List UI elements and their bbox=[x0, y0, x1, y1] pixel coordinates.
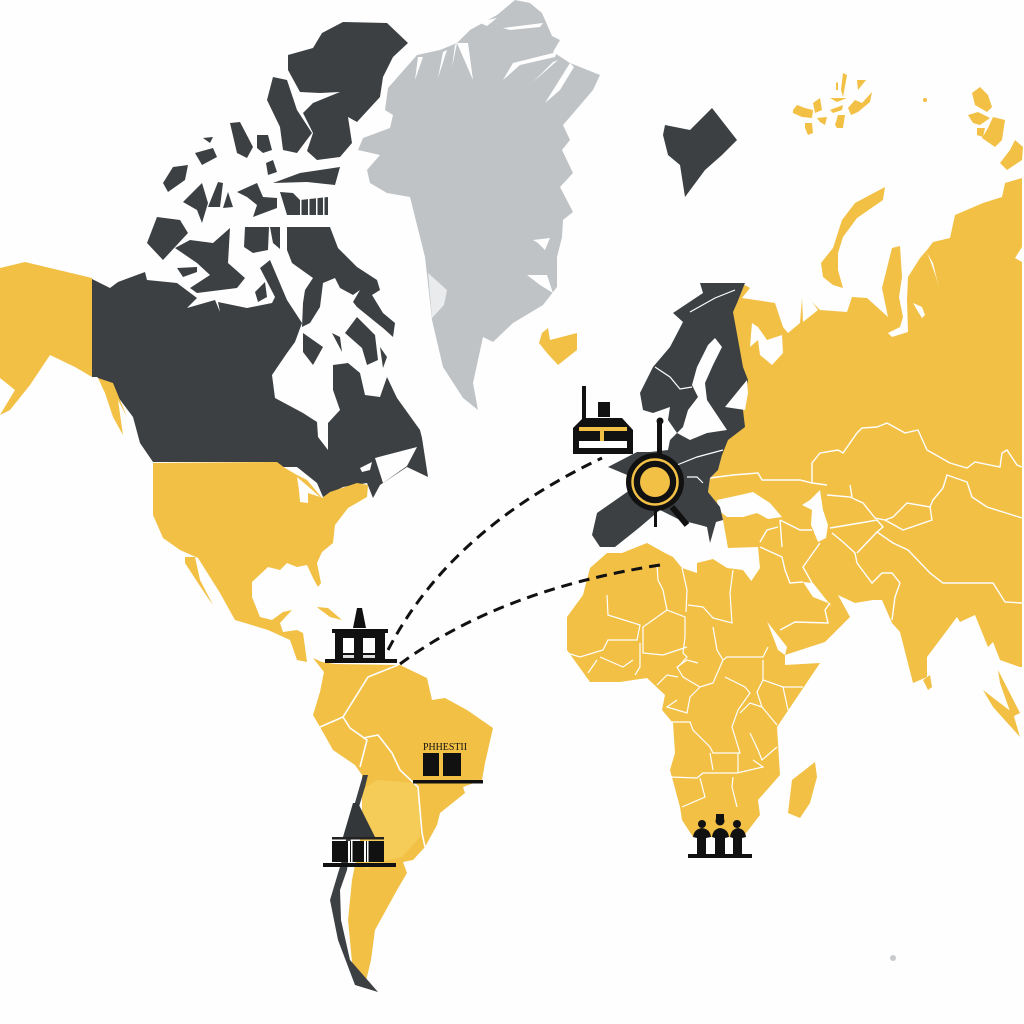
gulf of finland bbox=[725, 380, 748, 410]
small grey dot bbox=[890, 955, 896, 961]
svalbard bbox=[663, 108, 737, 197]
iceland bbox=[539, 328, 577, 365]
madagascar bbox=[788, 762, 817, 818]
icon: building brazil bbox=[413, 742, 483, 784]
europe bbox=[592, 283, 748, 547]
europe borders bbox=[655, 290, 735, 483]
arctic islands bbox=[793, 73, 1023, 170]
building sign text: PHHESTII bbox=[423, 742, 467, 753]
south america bbox=[313, 658, 493, 985]
south east asia and sri lanka bbox=[923, 670, 1020, 737]
canada and arctic archipelago bbox=[92, 22, 428, 498]
africa borders bbox=[567, 565, 803, 807]
alaska bbox=[0, 262, 127, 435]
usa mexico central america bbox=[153, 462, 368, 662]
lighter interior region bbox=[362, 780, 420, 870]
great lakes bbox=[297, 477, 320, 503]
greenland bbox=[358, 0, 600, 410]
icon: router building bbox=[573, 386, 633, 454]
newfoundland sea cutout bbox=[360, 447, 417, 483]
asia borders bbox=[710, 423, 1022, 630]
baltic sea bbox=[677, 338, 727, 440]
south america borders bbox=[320, 665, 425, 847]
bar cutouts bbox=[300, 197, 324, 215]
icon: three people bbox=[688, 814, 752, 858]
icon: oil platform venezuela bbox=[325, 608, 397, 663]
seas in asia bbox=[717, 253, 939, 607]
africa bbox=[567, 543, 820, 837]
icon: platform chile bbox=[323, 803, 396, 867]
chile coast bbox=[330, 775, 378, 992]
dashed route lines bbox=[388, 458, 660, 664]
icon: target magnifier bbox=[626, 418, 687, 527]
russia and asia bbox=[708, 178, 1022, 683]
